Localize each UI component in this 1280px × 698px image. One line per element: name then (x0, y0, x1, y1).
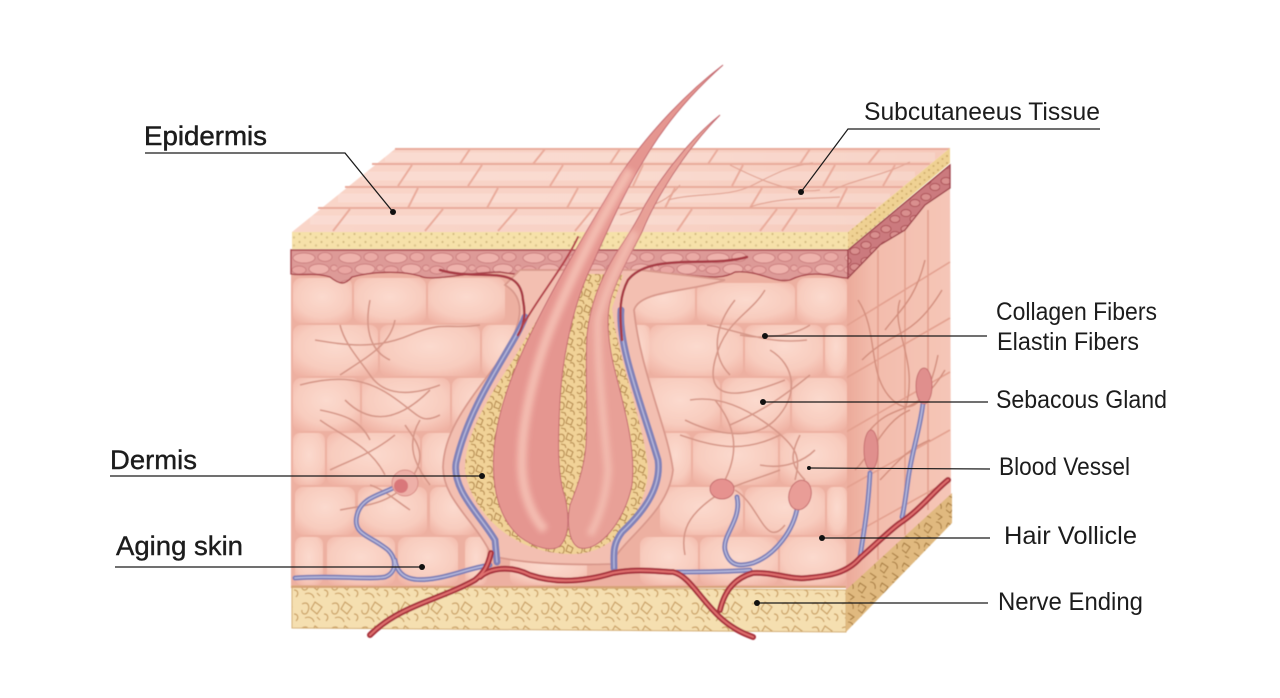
label: Blood Vessel (807, 453, 1130, 481)
follicle yellow interior (465, 273, 648, 554)
collagen and elastin fibers (300, 290, 815, 555)
hair bulb: right lobe and second shaft (568, 115, 720, 548)
illustration: skin block (291, 65, 952, 637)
label: Collagen Fibers: Collagen Fibers (996, 298, 1157, 326)
follicle outer sheath (443, 270, 725, 564)
label: Subcutaneous Tissue (798, 98, 1100, 195)
label: Dermis: Dermis (110, 445, 197, 475)
label: Epidermis: Epidermis (144, 121, 267, 151)
label: Elastin Fibers: Elastin Fibers (997, 328, 1139, 356)
label: Sebacous Gland: Sebacous Gland (996, 386, 1167, 414)
label: Nerve Ending (754, 588, 1143, 616)
top surface of the epidermis (292, 148, 950, 232)
label: Subcutaneous Tissue: Subcutaneeus Tissue (864, 98, 1100, 126)
label: Hair Vollicle: Hair Vollicle (1004, 522, 1137, 550)
label: Dermis (110, 445, 485, 479)
label: Sebacous Gland (760, 386, 1167, 414)
dermis cell wall (291, 262, 847, 588)
veins (295, 403, 923, 580)
right lobe highlight (590, 232, 635, 535)
sheath vessels (440, 237, 747, 568)
sebaceous glands (392, 368, 932, 512)
left lobe highlight (522, 170, 630, 530)
arteries (370, 480, 948, 637)
stratified yellow layer (292, 148, 950, 249)
subcutaneous yellow layer (291, 493, 952, 632)
pink vascular layer (291, 165, 950, 283)
hair follicle (440, 65, 747, 568)
label: Aging skin (115, 531, 425, 570)
right side face of the block (846, 170, 951, 612)
hair bulb: left lobe and main shaft (493, 65, 723, 549)
label: Aging skin: Aging skin (116, 531, 243, 561)
label: Hair Vollicle (819, 522, 1137, 550)
label: Elastin Fibers (762, 328, 1139, 356)
label: Nerve Ending: Nerve Ending (998, 588, 1143, 616)
label: Blood Vessel: Blood Vessel (999, 453, 1130, 481)
label: Epidermis (144, 121, 396, 215)
